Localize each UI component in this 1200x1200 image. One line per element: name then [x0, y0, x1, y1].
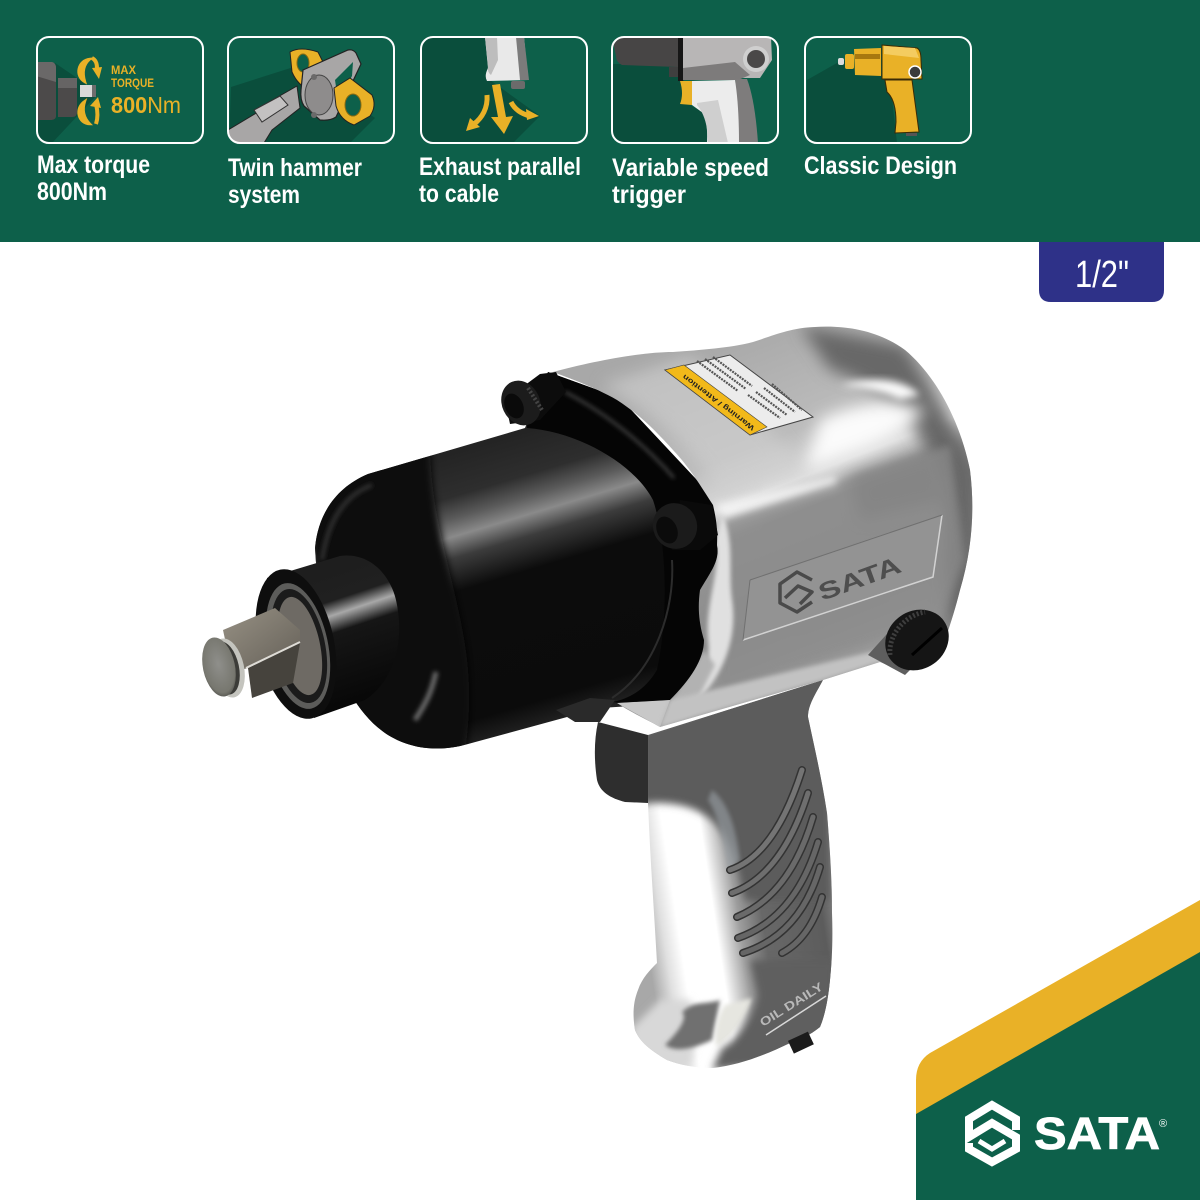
icon text: MAX: MAX	[111, 63, 136, 77]
icon frame	[228, 37, 394, 143]
feature: twin hammer	[228, 37, 394, 209]
embossed brand mark	[780, 572, 812, 612]
knob	[868, 597, 961, 683]
size tag	[1039, 242, 1164, 302]
label: variable speed: Variable speed	[612, 154, 769, 182]
header band	[0, 0, 1200, 242]
grip ribs	[730, 770, 822, 953]
black motor cover	[315, 372, 718, 748]
flange bolts	[494, 372, 718, 556]
size text: 1/2"	[1075, 254, 1129, 296]
label: trigger: trigger	[612, 181, 686, 209]
drive tip	[206, 635, 250, 701]
icon text: 800Nm: 800Nm	[111, 92, 181, 118]
feature: trigger	[612, 37, 778, 209]
label: 800Nm: 800Nm	[37, 178, 107, 206]
registered mark: ®	[1159, 1118, 1167, 1130]
bolt side	[645, 496, 718, 556]
icon: twin hammer	[228, 37, 394, 143]
label: classic design: Classic Design	[804, 152, 957, 180]
icon: torque	[36, 37, 203, 143]
yellow stripe	[916, 900, 1200, 1120]
icon text: TORQUE: TORQUE	[111, 76, 154, 90]
embossed brand text: SATA	[815, 552, 905, 607]
handle	[630, 670, 835, 1070]
feature: max torque	[36, 37, 203, 206]
label: exhaust parallel: Exhaust parallel	[419, 153, 581, 181]
feature: classic design	[804, 37, 971, 180]
green corner	[916, 952, 1200, 1200]
logo	[969, 1105, 1167, 1162]
icon frame	[421, 37, 587, 143]
feature: exhaust	[419, 37, 587, 208]
small lug below cover	[556, 698, 615, 722]
label: to cable: to cable	[419, 180, 499, 208]
embossed text: oil daily: OIL DAILY	[757, 980, 826, 1030]
product: impact wrench	[197, 325, 980, 1070]
logo mark	[969, 1105, 1016, 1162]
label: twin hammer: Twin hammer	[228, 154, 362, 182]
icon frame	[612, 37, 778, 143]
icon frame	[37, 37, 203, 143]
label: max torque: Max torque	[37, 151, 150, 179]
aluminium housing	[553, 325, 980, 727]
warning label	[665, 355, 813, 435]
bolt top	[494, 372, 566, 432]
label: system: system	[228, 181, 300, 209]
name plate recess	[743, 515, 942, 640]
nose collar	[243, 556, 399, 726]
square drive	[197, 608, 300, 701]
brand corner	[916, 900, 1200, 1200]
icon: trigger	[612, 37, 778, 143]
icon: classic design	[805, 37, 971, 143]
warning text: Warning / Attention	[682, 372, 756, 431]
trigger	[595, 722, 648, 803]
logo wordmark: SATA	[1034, 1108, 1160, 1159]
icon: exhaust arrows	[421, 37, 587, 143]
icon frame	[805, 37, 971, 143]
